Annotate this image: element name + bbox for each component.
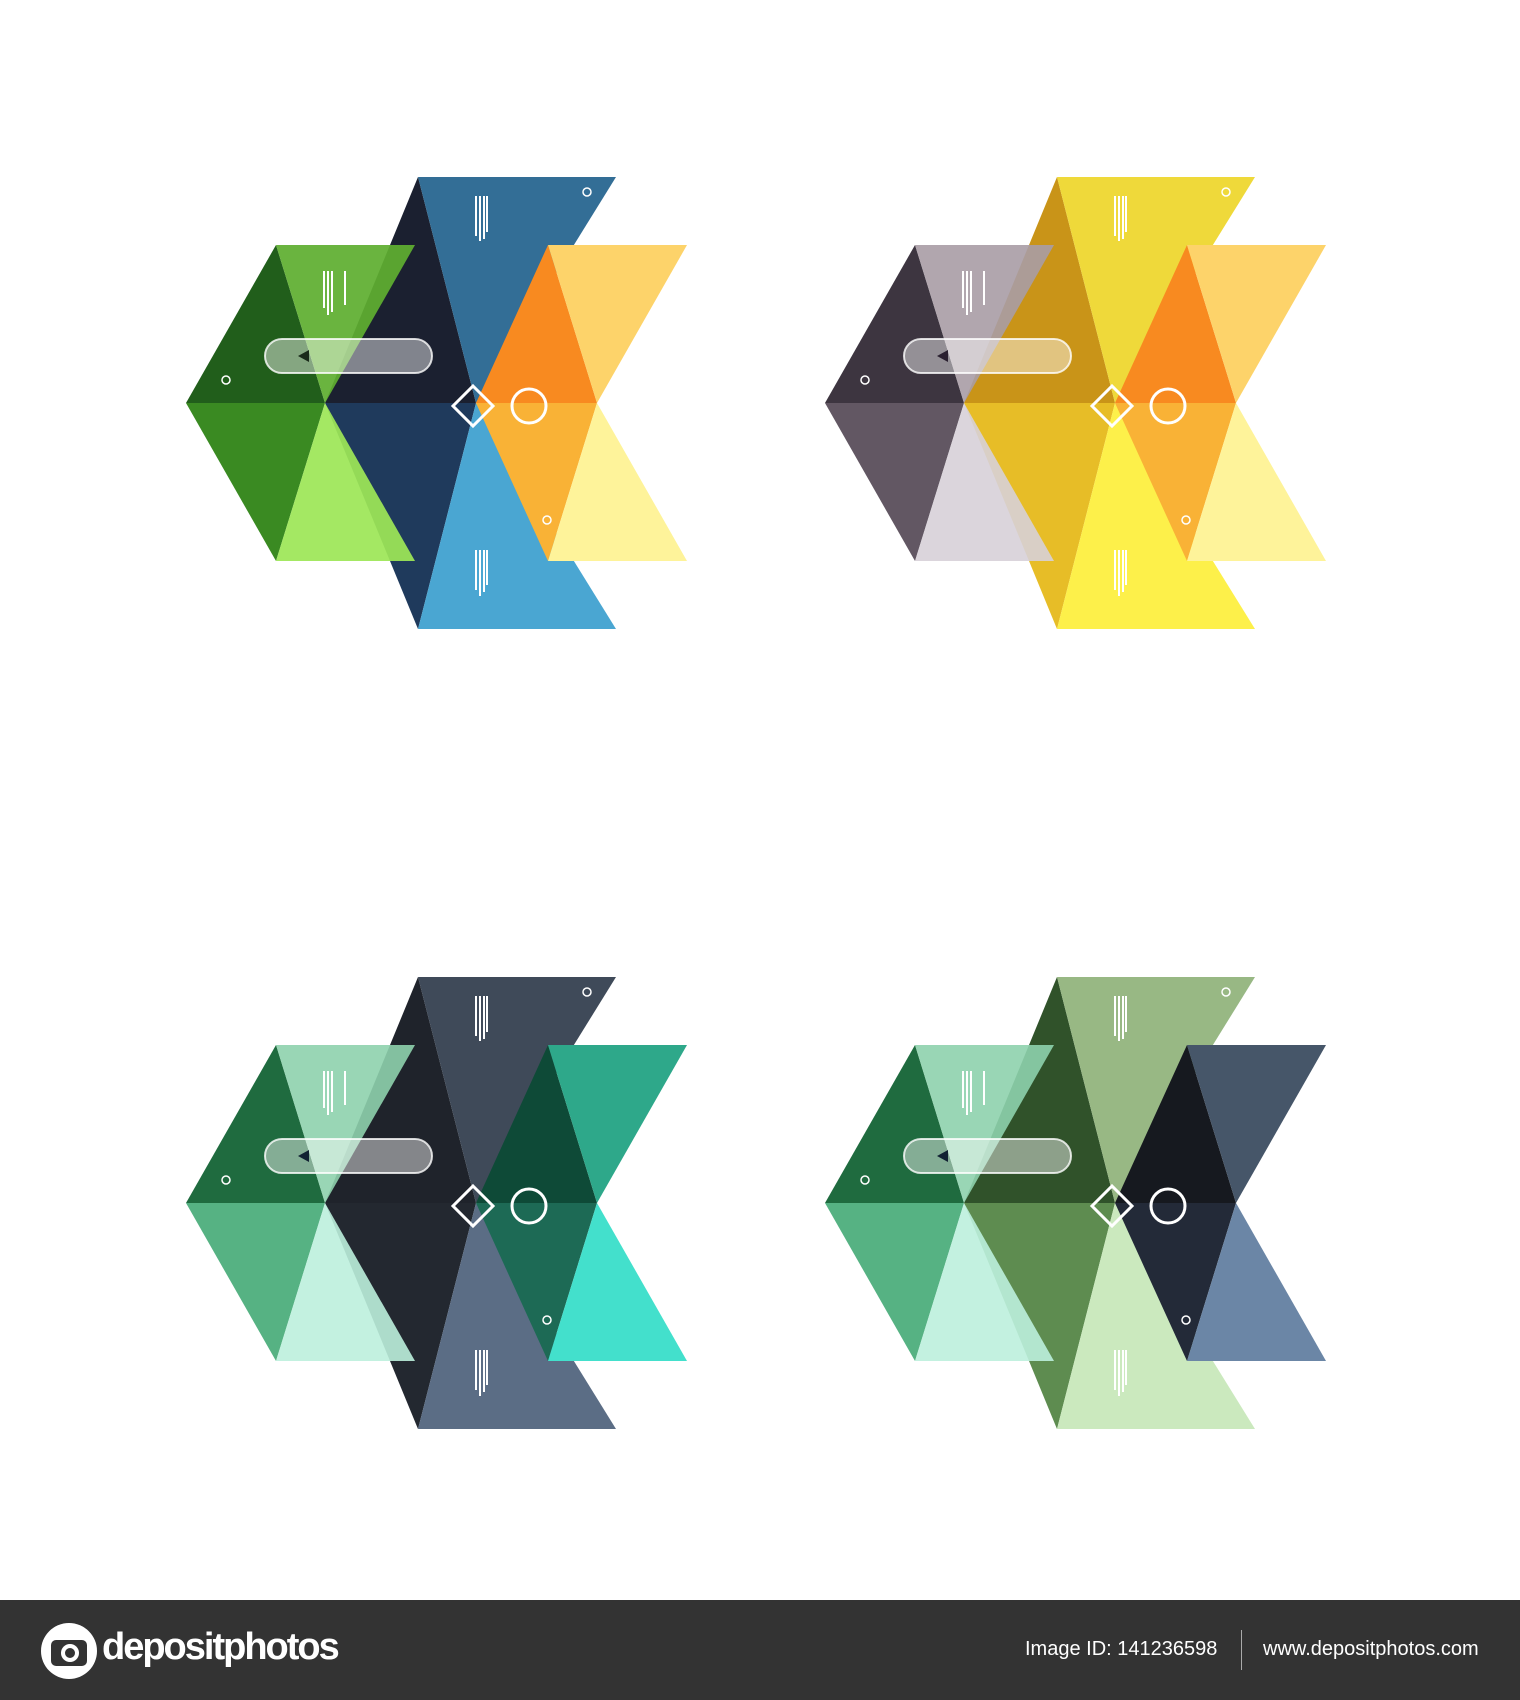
unit: gray [825, 245, 1054, 561]
logo text: depositphotos [102, 1626, 338, 1668]
unit: green [186, 245, 415, 561]
unit: mint [186, 1045, 415, 1361]
unit: olive [964, 977, 1255, 1429]
unit: orange [1115, 245, 1326, 561]
unit: yellow [964, 177, 1255, 629]
icon: camera [41, 1623, 97, 1679]
graphic 4: mint olive slate chevrons [825, 977, 1326, 1429]
graphic 2: gray yellow orange chevrons [825, 177, 1326, 629]
website: www.depositphotos.com [1263, 1638, 1479, 1660]
unit: blue [325, 177, 616, 629]
image id: Image ID: 141236598 [1025, 1638, 1217, 1660]
unit: teal [476, 1045, 687, 1361]
unit: navy [325, 977, 616, 1429]
decorations [861, 988, 1230, 1396]
footer logo [41, 1623, 338, 1679]
unit: orange [476, 245, 687, 561]
decorations [861, 188, 1230, 596]
footer bar [0, 1600, 1520, 1700]
decorations [222, 188, 591, 596]
graphic 1: green blue orange chevrons [186, 177, 687, 629]
graphic 3: mint navy teal chevrons [186, 977, 687, 1429]
unit: slate [1115, 1045, 1326, 1361]
unit: mint [825, 1045, 1054, 1361]
decorations [222, 988, 591, 1396]
